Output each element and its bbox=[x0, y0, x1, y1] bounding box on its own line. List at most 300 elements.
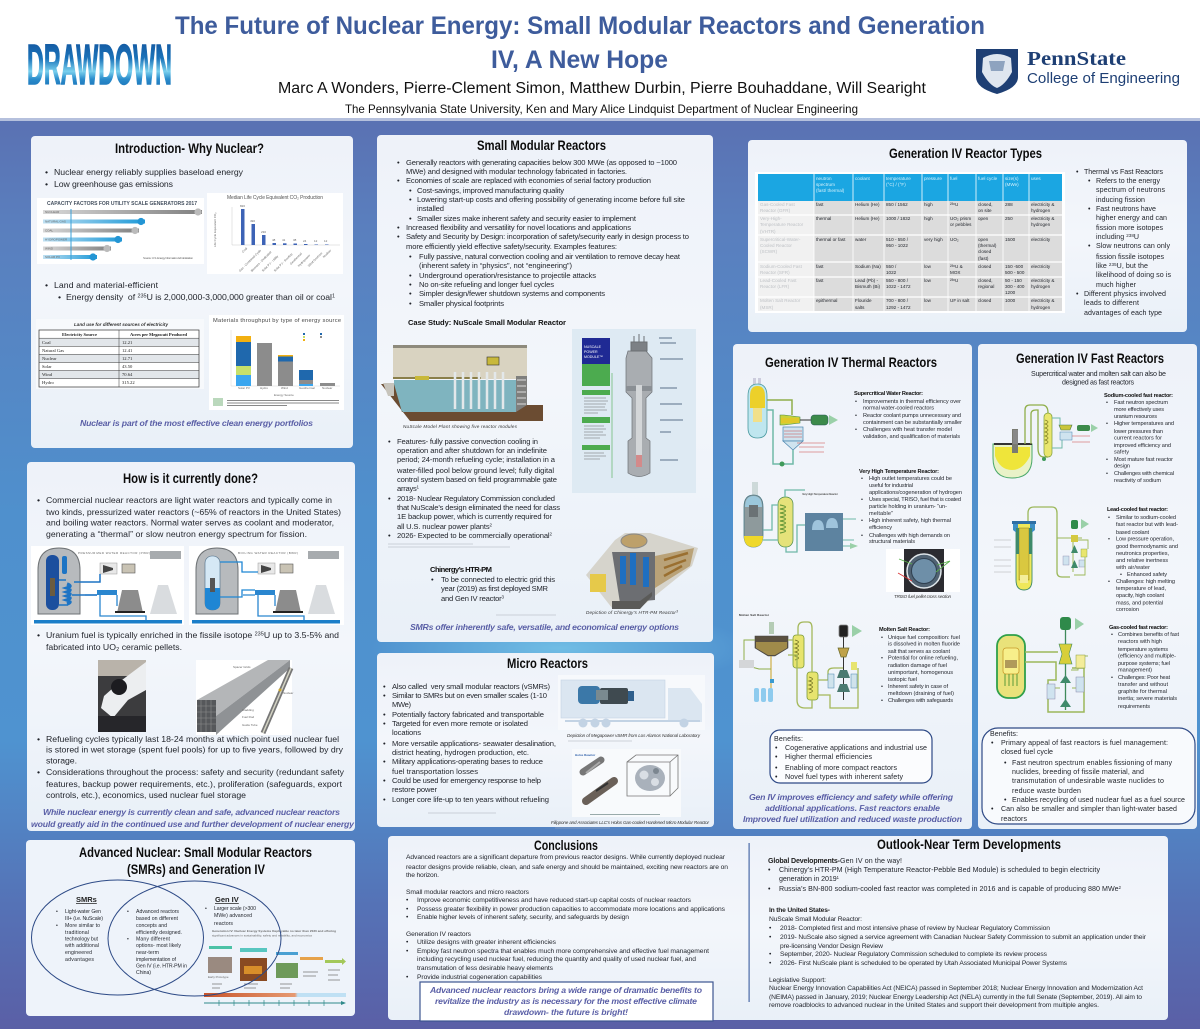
text: lead-cooled: neutronics properties, bbox=[1116, 551, 1169, 557]
callout: how: would greatly aid in the continued use and further development of nuclear energy bbox=[31, 819, 355, 829]
caption: TRISO: TRISO fuel pellet cross section bbox=[894, 594, 951, 599]
text: micro bullets: restore power bbox=[392, 785, 437, 794]
table: reactor types: hydrogen bbox=[1031, 222, 1051, 227]
text: conclusions body: Provide industrial cogeneration capabilities bbox=[417, 974, 543, 981]
text: NuScale features: 1 bbox=[416, 485, 419, 490]
table: reactor types: low bbox=[924, 298, 932, 303]
text: thermal vs fast: Fast neutrons have bbox=[1096, 205, 1156, 213]
chart: capacity factors: SOLAR PV bbox=[45, 255, 60, 259]
text: refueling and considerations bbox=[37, 734, 345, 800]
text: conclusions body bbox=[406, 854, 728, 981]
table: reactor types: Lead-Cooled Fast bbox=[760, 278, 797, 283]
text: conclusions body: • bbox=[406, 939, 409, 946]
text: conclusions body: Improve economic competitiveness and have reduced start-up capital costs of nuclear reactors bbox=[417, 897, 692, 904]
text: thermal vs fast: 238 bbox=[1126, 233, 1134, 238]
venn text: overlap: based on different bbox=[136, 916, 179, 922]
text: very high temperature reactor: • bbox=[861, 497, 863, 503]
table: reactor types bbox=[755, 172, 1065, 313]
text: sodium-cooled bbox=[1104, 393, 1174, 484]
venn text: Gen IV: Larger scale (>300 bbox=[214, 906, 256, 912]
venn text: overlap: efficiently designed. bbox=[136, 930, 182, 936]
table: reactor types: high bbox=[924, 216, 933, 221]
text: molten salt reactor: Molten Salt Reactor: bbox=[879, 627, 930, 633]
diagram: fuel assembly bbox=[196, 660, 293, 735]
table: reactor types: Reactor (LFR) bbox=[760, 284, 790, 289]
text: lead-cooled: with air/water bbox=[1115, 565, 1150, 571]
box: fast benefits: nuclides, breeding of fissile material, and bbox=[1012, 768, 1144, 776]
text: SMR overview bullets: Generally reactors with generating capacities below 300 MWe (as opposed to ~1000 bbox=[406, 158, 677, 167]
text: Chinergy: 3 bbox=[501, 595, 504, 600]
callout: Gen IV: Gen IV improves efficiency and safety while offering bbox=[749, 792, 954, 802]
text: lead-cooled: opacity, high coolant bbox=[1116, 593, 1164, 599]
box: thermal benefits: • bbox=[775, 744, 778, 752]
table: reactor types: open bbox=[978, 216, 989, 221]
table: reactor types: 850 / 1562 bbox=[886, 202, 908, 207]
box: fast benefits: reduce waste burden bbox=[1012, 787, 1081, 795]
text: lead-cooled: Lead-cooled fast reactor: bbox=[1107, 507, 1168, 513]
chart: life cycle CO2: 820 bbox=[240, 204, 245, 208]
text: very high temperature reactor: useful for industrial bbox=[869, 483, 913, 489]
heading: conclusions: Conclusions bbox=[534, 837, 598, 853]
text: thermal vs fast: spectrum of neutrons bbox=[1096, 186, 1165, 194]
text: refueling and considerations: • bbox=[37, 767, 40, 777]
chart: life cycle CO2: Hydropower bbox=[297, 253, 311, 268]
box: fast benefits: closed fuel cycle bbox=[1001, 748, 1053, 756]
text: conclusions body: Utilize designs with greater inherent efficiencies bbox=[417, 939, 557, 946]
venn heading: Gen IV: Gen IV bbox=[215, 895, 239, 904]
table: reactor types: 1022 - 1472 bbox=[886, 284, 911, 289]
image: NuScale plant bbox=[381, 345, 543, 421]
table: reactor types: 550 / bbox=[886, 264, 897, 269]
table: reactor types: regional bbox=[978, 284, 994, 289]
table: reactor types: fast bbox=[816, 278, 824, 283]
box: thermal benefits: Higher thermal efficiencies bbox=[785, 753, 872, 761]
text: SMR overview bullets: Simpler design/fewer shutdown systems and components bbox=[419, 289, 605, 298]
text: molten salt reactor: • bbox=[881, 635, 883, 641]
chart: life cycle CO2: Coal bbox=[241, 246, 248, 254]
text: very high temperature reactor: meltable” bbox=[869, 511, 893, 517]
chart: life cycle CO2: Median Life Cycle Equivalent CO₂ Production bbox=[227, 195, 323, 201]
chart: life cycle CO2: 38 bbox=[293, 238, 297, 242]
text: global developments: 1 bbox=[837, 875, 840, 880]
text: thermal vs fast: fission fissile isotopes bbox=[1096, 253, 1164, 261]
text: SMR overview bullets: • bbox=[409, 195, 412, 204]
table: reactor types: 1200 bbox=[1005, 290, 1016, 295]
text: global developments bbox=[768, 857, 1122, 893]
text: lead-cooled: Low pressure operation, bbox=[1116, 536, 1174, 542]
text: gas-cooled: purpose systems; fuel bbox=[1118, 661, 1170, 667]
venn text: overlap: • bbox=[127, 936, 129, 942]
diagram: fuel assembly: Fuel Rod bbox=[242, 715, 255, 719]
text: lead-cooled: • bbox=[1108, 515, 1110, 521]
text: refueling and considerations: is stored in wet storage (spent fuel pools) for up to five years, followed by dry bbox=[46, 744, 344, 754]
text: gas-cooled: Challenges: Poor heat bbox=[1118, 675, 1170, 681]
header band bbox=[0, 0, 1200, 121]
chart: capacity factors: COAL bbox=[45, 228, 54, 232]
text: gas-cooled: Combines benefits of fast bbox=[1118, 632, 1179, 638]
text: global developments: • bbox=[768, 866, 771, 874]
table: reactor types: thermal or fast bbox=[816, 237, 846, 242]
text: Chinergy: and Gen IV reactor bbox=[441, 594, 502, 603]
text: in the United States: • bbox=[769, 925, 772, 932]
table: land use bbox=[36, 319, 204, 389]
text: micro bullets: • bbox=[383, 691, 386, 700]
text: NuScale features: 1E backup power, which is currently required for bbox=[397, 512, 552, 521]
text: lead-cooled: corrosion bbox=[1116, 607, 1139, 613]
text: SMR overview bullets: Smaller physical footprints bbox=[419, 299, 504, 308]
box: thermal benefits bbox=[770, 730, 932, 783]
table: reactor types: electricity & bbox=[1031, 216, 1054, 221]
chart: materials throughput: Solar PV bbox=[238, 386, 250, 390]
text: molten salt reactor: Inherent safety in case of bbox=[888, 684, 948, 690]
table: reactor types: epithermal bbox=[816, 298, 837, 303]
text: SMR overview bullets: • bbox=[397, 223, 400, 232]
text: legislative support: remove roadblocks to advanced nuclear in the United States and support their development from multiple angles. bbox=[769, 1002, 1099, 1009]
text: micro bullets: • bbox=[383, 739, 386, 748]
bullets: land and material: U is 2,000,000-3,000,000 greater than oil or coal bbox=[147, 292, 332, 302]
text: light water reactors: and boiling water reactors. Normal water serves as coolant and moderator, bbox=[46, 518, 334, 528]
text: SMR overview bullets: MWe) and designed with modular technology fabricated in factories. bbox=[406, 167, 627, 176]
text: gas-cooled: transfer and without bbox=[1118, 682, 1168, 688]
table: reactor types: (SCWR) bbox=[760, 249, 778, 254]
text: uranium fuel: 235 bbox=[255, 631, 264, 637]
table: reactor types: Gas-Cooled Fast bbox=[760, 202, 795, 207]
text: thermal vs fast: Different physics involved bbox=[1084, 290, 1166, 298]
table: reactor types: Bismuth (Bi) bbox=[855, 284, 880, 289]
box: fast benefits: • bbox=[991, 805, 994, 813]
callout: how bbox=[31, 807, 355, 829]
text: molten salt reactor: Unique fuel composition: fuel bbox=[888, 635, 960, 641]
table: land use: Wind bbox=[42, 372, 53, 377]
diagram: very high temperature reactor bbox=[744, 482, 858, 552]
text: conclusions body: the horizon. bbox=[406, 872, 439, 879]
text: conclusions body: • bbox=[406, 948, 409, 955]
box: thermal benefits: Benefits: bbox=[774, 735, 803, 743]
box: fast benefits: reactors bbox=[1001, 815, 1027, 823]
table: land use: 12.21 bbox=[122, 340, 133, 345]
callout: conclusion bbox=[420, 982, 713, 1021]
title: IV, A New Hope bbox=[491, 46, 668, 74]
venn text: SMRs: More similar to bbox=[65, 923, 100, 929]
text: in the United States: • bbox=[769, 951, 772, 958]
chart: life cycle CO2: Wind Onshore bbox=[307, 251, 324, 268]
text: global developments: generation in 2019 bbox=[779, 875, 837, 883]
text: micro bullets: Potentially factory fabricated and transportable bbox=[392, 710, 544, 719]
text: uranium fuel: Uranium fuel is typically enriched in the fissile isotope bbox=[46, 630, 252, 640]
text: gas-cooled: graphite for thermal bbox=[1118, 689, 1167, 695]
text: refueling and considerations: Refueling cycles typically last 18-24 months at which point used nuclear fuel bbox=[46, 734, 339, 744]
venn heading: SMRs: SMRs bbox=[76, 895, 97, 904]
text: thermal vs fast: fission more isotopes bbox=[1096, 224, 1163, 232]
chart: life cycle CO2: 12 bbox=[314, 239, 318, 243]
text: micro bullets: Also called very small modular reactors (vSMRs) bbox=[392, 682, 550, 691]
text: very high temperature reactor: • bbox=[861, 518, 863, 524]
text: SMR overview bullets: • bbox=[397, 158, 400, 167]
bullets: land and material bbox=[45, 280, 335, 302]
text: in the United States: September, 2020- Nuclear Regulatory Commission scheduled to complete its review process bbox=[780, 951, 1048, 958]
chart: life cycle CO2: Solar PV - Utility bbox=[261, 254, 280, 273]
table: land use: Land use for different sources of electricity bbox=[74, 322, 168, 327]
text: SMR overview bullets: • bbox=[409, 271, 412, 280]
table: reactor types: 50 - 150 bbox=[1005, 278, 1022, 283]
bullets: land and material: • bbox=[58, 292, 61, 302]
text: supercritical water reactor: Improvements in thermal efficiency over bbox=[863, 399, 961, 405]
text: NuScale features: 2026- Expected to be commercially operational bbox=[397, 531, 550, 540]
affiliation: The Pennsylvania State University, Ken and Mary Alice Lindquist Department of Nuclear Engineering bbox=[345, 102, 858, 116]
text: global developments: 2 bbox=[1119, 885, 1122, 890]
table: land use: Solar bbox=[42, 364, 52, 369]
text: global developments: Chinergy’s HTR-PM (High Temperature Reactor-Pebble Bed Module) is scheduled to begin electricity bbox=[779, 866, 1100, 874]
text: SMR overview bullets: Underground operation/resistance to projectile attacks bbox=[419, 271, 596, 280]
text: SMR overview bullets: • bbox=[397, 176, 400, 185]
text: micro bullets: • bbox=[383, 776, 386, 785]
venn text: SMRs: technology but bbox=[65, 936, 99, 942]
chart: materials throughput: Hydro bbox=[260, 386, 268, 390]
text: NuScale features: arrays bbox=[397, 484, 417, 493]
bullets: baseload and emissions bbox=[45, 167, 244, 189]
text: molten salt reactor: unimportant, homogenous bbox=[888, 670, 953, 676]
text: Chinergy: year (2019) as first deployed SMR bbox=[441, 584, 549, 593]
table: land use: Coal bbox=[42, 340, 51, 345]
text: thermal vs fast: including bbox=[1096, 233, 1124, 241]
text: very high temperature reactor bbox=[859, 469, 962, 545]
box: thermal benefits: • bbox=[775, 764, 778, 772]
text: molten salt reactor: is dissolved in molten fluoride bbox=[888, 642, 960, 648]
text: SMR overview bullets: installed bbox=[417, 204, 444, 213]
table: reactor types: uses bbox=[1031, 176, 1041, 181]
text: gas-cooled: management) bbox=[1118, 668, 1152, 674]
venn text: overlap: Gen IV (i.e. HTR-PM in bbox=[136, 964, 187, 970]
box: fast benefits: transmutation of undesirable waste nuclides to bbox=[1012, 777, 1164, 785]
text: in the United States: 2018- Completed first and most intensive phase of review by Nuclear Regulatory Commission bbox=[780, 925, 1050, 932]
table: land use: Hydro bbox=[42, 380, 54, 385]
text: thermal vs fast: like bbox=[1096, 262, 1107, 270]
text: NuScale features: 2 bbox=[549, 532, 552, 537]
text: in the United States: • bbox=[769, 934, 772, 941]
text: SMR overview bullets: Fully passive, natural convection cooling and air ventilation to remove decay heat bbox=[419, 252, 681, 261]
bullets: baseload and emissions: • bbox=[45, 179, 48, 189]
callout: Gen IV: additional applications. Fast reactors enable bbox=[765, 803, 940, 813]
bullets: baseload and emissions: Low greenhouse gas emissions bbox=[54, 179, 174, 189]
text: light water reactors: • bbox=[37, 495, 40, 505]
caption: Megapower: Depiction of Megapower vSMR from Los Alamos National Laboratory bbox=[567, 733, 701, 738]
table: reactor types: (MWe) bbox=[1005, 182, 1019, 187]
text: thermal vs fast: Thermal vs Fast Reactors bbox=[1084, 168, 1163, 176]
table: reactor types: 250 bbox=[1005, 216, 1013, 221]
table: reactor types: 950 - 1022 bbox=[886, 243, 908, 248]
image: Chinergy HTR-PM bbox=[586, 533, 698, 609]
box: fast benefits bbox=[982, 728, 1195, 824]
diagram: molten salt reactor: Molten Salt Reactor bbox=[739, 613, 770, 617]
reference lines bbox=[428, 741, 632, 828]
table: reactor types: Reactor (GFR) bbox=[760, 208, 791, 213]
table: reactor types: Cooled Reactor bbox=[760, 243, 792, 248]
chart: life cycle CO2: 24 bbox=[303, 239, 307, 243]
bullets: baseload and emissions: Nuclear energy reliably supplies baseload energy bbox=[54, 167, 244, 177]
text: thermal vs fast bbox=[1076, 168, 1171, 317]
table: reactor types: Lead (Pb) - bbox=[855, 278, 878, 283]
text: lead-cooled: Challenges: high melting bbox=[1116, 579, 1175, 585]
text: SMR overview bullets: • bbox=[409, 280, 412, 289]
heading: SMR: Small Modular Reactors bbox=[477, 137, 606, 153]
text: legislative support: Nuclear Energy Innovation Capabilities Act (NEICA) passed in September 2018; Nuclear Energy Innovation and Modernization Act bbox=[769, 985, 1143, 992]
table: reactor types: (MSR) bbox=[760, 305, 774, 310]
text: micro bullets: • bbox=[383, 795, 386, 804]
text: conclusions body: • bbox=[406, 906, 409, 913]
text: NuScale features: operation and after shutdown for an indefinite bbox=[397, 446, 547, 455]
diagram: pressurized water reactor bbox=[31, 546, 184, 625]
text: thermal vs fast: • bbox=[1088, 205, 1091, 213]
diagram: fuel assembly: Spacer Grids bbox=[233, 665, 251, 669]
text: thermal vs fast: U, but the bbox=[1117, 262, 1148, 270]
image: NuScale power module: MODULE™ bbox=[584, 355, 603, 359]
text: lead-cooled: Similar to sodium-cooled bbox=[1116, 515, 1176, 521]
timeline: generations of nuclear bbox=[204, 929, 346, 1006]
text: lead-cooled: based coolant bbox=[1116, 530, 1149, 536]
image: NuScale power module: POWER bbox=[584, 350, 598, 354]
text: SMR overview bullets: • bbox=[397, 232, 400, 241]
title bbox=[175, 12, 985, 74]
image: Megapower truck bbox=[558, 675, 705, 730]
chart: capacity factors: WIND bbox=[45, 246, 54, 250]
table: land use: 70.64 bbox=[122, 372, 133, 377]
caption: Holos: Filippone and Associates LLC’s Holos Gas-cooled Hardened Micro Modular Reactor bbox=[551, 820, 709, 825]
text: Chinergy bbox=[430, 565, 555, 603]
text: thermal vs fast: inducing fission bbox=[1096, 196, 1145, 204]
table: reactor types: spectrum bbox=[816, 182, 835, 187]
text: conclusions body: Possess greater flexibility in power production capacities to accommodate more locations and applications bbox=[417, 906, 726, 913]
venn text: Gen IV: reactors bbox=[214, 921, 233, 927]
table: reactor types: closed, bbox=[978, 278, 993, 283]
text: refueling and considerations: features, backup power requirements, etc.), proliferation (safeguards, export bbox=[46, 779, 343, 789]
table: reactor types: 700 - 800 / bbox=[886, 298, 909, 303]
panel: Introduction bbox=[31, 136, 353, 448]
table: reactor types: Helium (He) bbox=[855, 202, 880, 207]
bullets: land and material: 1 bbox=[332, 293, 335, 299]
text: global developments: Gen IV on the way! bbox=[840, 857, 902, 865]
text: supercritical water reactor: Reactor coolant pumps unnecessary and bbox=[863, 413, 961, 419]
table: reactor types: ²³⁸U bbox=[950, 202, 958, 207]
table: land use: 12.71 bbox=[122, 356, 133, 361]
text: supercritical water reactor: validation, and qualification of materials bbox=[863, 434, 960, 440]
text: lead-cooled: temperature of lead, bbox=[1116, 586, 1166, 592]
box: thermal benefits: Cogenerative applications and industrial use bbox=[785, 744, 927, 752]
venn text: SMRs: traditional bbox=[65, 930, 89, 936]
timeline: generations of nuclear: significant advances in sustainability, safety and reliability, and economics bbox=[212, 934, 312, 938]
text: thermal vs fast: Refers to the energy bbox=[1096, 177, 1160, 185]
text: Chinergy: • bbox=[431, 575, 434, 584]
text: sodium-cooled: • bbox=[1106, 421, 1108, 427]
heading: reactor types: Generation IV Reactor Types bbox=[889, 145, 1042, 161]
text: NuScale features bbox=[388, 437, 560, 540]
diagram: boiling water reactor bbox=[189, 546, 344, 625]
subheading: case study: Case Study: NuScale Small Modular Reactor bbox=[408, 318, 566, 327]
venn text: SMRs: • bbox=[56, 909, 58, 915]
panel: Small Modular Reactors bbox=[377, 135, 713, 642]
chart: life cycle CO2 bbox=[207, 193, 343, 274]
divider bbox=[748, 843, 750, 1002]
text: sodium-cooled: safety bbox=[1114, 450, 1129, 456]
text: SMR overview bullets: Cost-savings, improved manufacturing quality bbox=[417, 186, 564, 195]
table: reactor types: closed, bbox=[978, 202, 993, 207]
table: reactor types: Reactor (SFR) bbox=[760, 270, 790, 275]
chart: materials throughput: Geothermal bbox=[299, 386, 315, 390]
venn text: overlap: Many different bbox=[136, 936, 171, 942]
venn text: overlap: near-term bbox=[136, 950, 159, 956]
table: land use: 43.50 bbox=[122, 364, 133, 369]
box: thermal benefits: • bbox=[775, 753, 778, 761]
table: reactor types: 500 - 500 bbox=[1005, 270, 1025, 275]
subheading: fast: designed as fast reactors bbox=[1062, 378, 1134, 386]
text: thermal vs fast: higher energy and can bbox=[1096, 214, 1167, 222]
chart: life cycle CO2: 41 bbox=[282, 238, 286, 242]
text: sodium-cooled: current reactors for bbox=[1114, 436, 1162, 442]
authors: Marc A Wonders, Pierre-Clement Simon, Matthew Durbin, Pierre Bouhaddane, Will Searight bbox=[278, 80, 927, 97]
table: reactor types: low bbox=[924, 278, 932, 283]
text: gas-cooled: (efficiency and multiple- bbox=[1118, 654, 1176, 660]
chart: life cycle CO2: 230 bbox=[261, 230, 266, 234]
timeline: generations of nuclear: Early Prototype bbox=[208, 975, 229, 979]
text: SMR overview bullets: • bbox=[409, 214, 412, 223]
table: land use: 12.41 bbox=[122, 348, 133, 353]
table: reactor types: electricity bbox=[1031, 237, 1051, 242]
image: NuScale power module bbox=[572, 329, 696, 493]
text: sodium-cooled: reactivity of sodium bbox=[1114, 478, 1161, 484]
text: in the United States: NuScale Small Modular Reactor: bbox=[769, 916, 862, 923]
table: reactor types: fuel bbox=[950, 176, 957, 181]
table: reactor types: water bbox=[855, 237, 867, 242]
panel: How is it currently done bbox=[27, 462, 355, 831]
table: land use: Electricity Source bbox=[62, 332, 97, 337]
venn text: overlap: implementation of bbox=[136, 957, 177, 963]
table: reactor types: 1000 / 1832 bbox=[886, 216, 911, 221]
table: reactor types: temperature bbox=[886, 176, 911, 181]
table: reactor types: (fast/ thermal) bbox=[816, 188, 845, 193]
chart: capacity factors: Source: U.S. Energy Information Administration bbox=[143, 256, 193, 260]
text: thermal vs fast: • bbox=[1076, 168, 1079, 176]
text: lead-cooled: and relative inertness bbox=[1116, 558, 1168, 564]
text: thermal vs fast: advantages of each type bbox=[1084, 309, 1162, 317]
text: in the United States: In the United States- bbox=[769, 907, 830, 914]
venn text: Gen IV bbox=[205, 906, 256, 927]
text: supercritical water reactor: normal water-cooled reactors bbox=[863, 406, 934, 412]
diagram: boiling water reactor: BOILING WATER REACTOR (BWR) bbox=[238, 551, 298, 555]
text: gas-cooled: reactors with high bbox=[1118, 639, 1162, 645]
heading: micro: Micro Reactors bbox=[507, 655, 588, 671]
text: in the United States: 2019- NuScale also signed a service agreement with Canadian Nuclear Safety Commission to submit an application under their bbox=[780, 934, 1147, 941]
text: conclusions body: • bbox=[406, 974, 409, 981]
text: light water reactors: generating a “thermal” or slow neutron energy spectrum for fission. bbox=[46, 529, 307, 539]
text: supercritical water reactor: containment can be substantially smaller bbox=[863, 420, 962, 426]
diagram: supercritical water reactor bbox=[748, 378, 838, 466]
diagram: fuel assembly: Cladding bbox=[242, 708, 254, 712]
text: micro bullets: MWe) bbox=[392, 700, 411, 709]
text: sodium-cooled: improved efficiency and bbox=[1114, 443, 1171, 449]
table: reactor types: or pebbles bbox=[950, 222, 972, 227]
text: very high temperature reactor: High inherent safety, high thermal bbox=[869, 518, 951, 524]
text: sodium-cooled: uranium resources bbox=[1114, 414, 1157, 420]
text: very high temperature reactor: structural materials bbox=[869, 539, 915, 545]
text: very high temperature reactor: particle holding in uranium- “un- bbox=[869, 504, 947, 510]
table: reactor types: hydrogen bbox=[1031, 284, 1051, 289]
table: reactor types: 150 -500 bbox=[1005, 264, 1024, 269]
text: gas-cooled: Gas-cooled fast reactor: bbox=[1109, 625, 1168, 631]
image: TRISO cross section bbox=[886, 549, 960, 592]
text: light water reactors: two kinds, pressurized water reactors (~65% of reactors in the United States) bbox=[46, 507, 341, 517]
text: NuScale features: that NuScale’s design eliminated the need for class bbox=[397, 503, 560, 512]
table: reactor types: low bbox=[924, 264, 932, 269]
text: very high temperature reactor: efficiency bbox=[869, 525, 892, 531]
